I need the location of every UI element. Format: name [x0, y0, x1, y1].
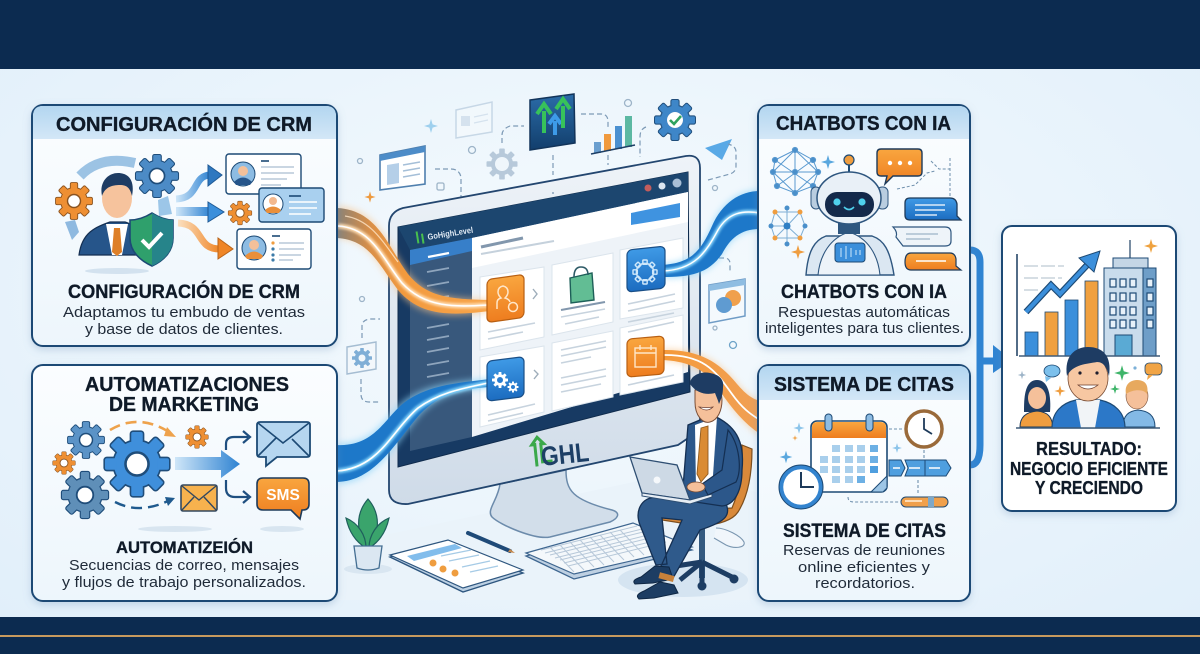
description: Adaptamos tu embudo de ventas	[63, 304, 305, 321]
icon tile: orange calendar	[627, 336, 664, 377]
icon: calendar	[811, 414, 887, 492]
arm and hand	[702, 430, 739, 495]
icon: small bar chart	[591, 116, 635, 154]
main arrow	[175, 450, 240, 478]
action button	[631, 203, 680, 225]
branch arrows	[226, 431, 250, 503]
small orange gear	[228, 202, 252, 224]
panel: CRM	[32, 105, 337, 346]
panel header band	[759, 366, 969, 400]
icon tile: blue gears	[487, 357, 524, 401]
office chair	[660, 445, 752, 590]
data stream: orange citas	[662, 349, 760, 436]
trousers	[638, 497, 728, 580]
icon: clock right	[906, 411, 942, 447]
top banner	[0, 0, 1200, 69]
description	[63, 304, 305, 338]
icon tile: orange user	[487, 274, 524, 323]
heading: SISTEMA DE CITAS	[774, 374, 954, 396]
heading: CONFIGURACIÓN DE CRM	[56, 112, 312, 136]
main content pane	[472, 192, 688, 437]
connector dashes	[361, 114, 736, 402]
description: inteligentes para tus clientes.	[765, 320, 964, 337]
shoes	[634, 566, 678, 599]
data stream: blue marketing	[337, 378, 490, 484]
icon: growth tile	[530, 94, 575, 150]
data stream: orange CRM	[337, 206, 490, 315]
panel: result	[1002, 226, 1176, 511]
icon: gear tile	[347, 342, 376, 374]
people: center man	[1052, 347, 1125, 428]
heading: CHATBOTS CON IA	[776, 113, 951, 135]
description: y base de datos de clientes.	[85, 321, 283, 338]
chat bubble: orange	[877, 149, 922, 184]
icon: gears	[53, 422, 208, 518]
chart axis and guides	[1017, 254, 1064, 356]
icon: envelope chat	[257, 422, 310, 466]
monitor stand	[490, 470, 618, 537]
icon: gears behind person	[56, 155, 178, 240]
subheading: SISTEMA DE CITAS	[783, 521, 946, 542]
logo text: GoHighLevel	[427, 225, 474, 242]
logo text	[417, 223, 474, 244]
bar chart	[1025, 281, 1098, 356]
header status icons	[644, 178, 682, 192]
connector arrow to result	[970, 250, 1012, 465]
contact card 2	[259, 188, 324, 222]
head	[690, 372, 723, 422]
dashed flow arrows	[110, 422, 176, 508]
timeline arrows	[889, 460, 951, 476]
GHL logo	[531, 432, 590, 473]
icon: faint gear	[486, 148, 518, 180]
icon: browser window	[380, 146, 425, 190]
jacket	[682, 415, 743, 506]
icon: shopping bag	[570, 267, 594, 303]
icon: faint browser	[456, 102, 492, 138]
description	[62, 557, 306, 591]
panel: chatbots	[758, 105, 970, 346]
icon: small network	[768, 206, 808, 246]
monitor body	[389, 156, 700, 504]
tablet document	[390, 540, 523, 592]
dashboard cards	[480, 238, 683, 427]
description	[765, 304, 964, 337]
icon: gear with check	[655, 100, 695, 140]
icon: robot	[806, 155, 894, 275]
dashboard header	[398, 172, 688, 250]
panel header band	[33, 106, 336, 139]
dashed links	[848, 429, 924, 502]
people: right man	[1123, 380, 1155, 427]
desk items	[344, 499, 692, 592]
icon tile: blue gear	[627, 246, 665, 292]
icon: SMS bubble: SMS	[266, 487, 300, 504]
description: recordatorios.	[815, 575, 915, 592]
people: left woman	[1020, 380, 1053, 427]
sidebar	[410, 238, 472, 451]
laptop	[630, 457, 712, 504]
icon: SMS bubble	[257, 478, 309, 519]
chat bubble: orange small	[905, 253, 961, 270]
subheading: AUTOMATIZEIÓN	[116, 538, 253, 557]
icon: shield with check	[130, 213, 173, 266]
bottom banner	[0, 617, 1200, 654]
icon: person in suit	[79, 173, 152, 256]
heading	[85, 374, 289, 416]
subheading: CHATBOTS CON IA	[781, 282, 947, 303]
icon: clock left	[779, 465, 823, 509]
description	[783, 542, 945, 592]
card details	[488, 294, 675, 421]
floating icons above monitor	[347, 94, 745, 402]
growth arrow	[1026, 251, 1100, 312]
flow arrows	[176, 165, 233, 259]
GHL logo: GHL	[540, 437, 590, 472]
pen	[468, 533, 510, 551]
description: Secuencias de correo, mensajes	[69, 557, 299, 574]
result text	[1010, 439, 1168, 498]
keyboard	[526, 523, 692, 579]
decorative sparkle and dots	[358, 100, 736, 348]
description: Respuestas automáticas	[778, 304, 950, 321]
icon: chat browser	[709, 279, 745, 323]
monitor	[389, 156, 700, 537]
panel: appointments	[758, 365, 970, 601]
desk surface	[340, 470, 780, 600]
description: online eficientes y	[798, 559, 931, 576]
chat bubble: blue	[905, 198, 961, 220]
panel: marketing automation	[32, 365, 337, 601]
icon: paper plane	[705, 139, 732, 160]
businessman at laptop	[618, 372, 752, 599]
webcam	[552, 192, 554, 194]
description: Reservas de reuniones	[783, 542, 945, 559]
shirt and tie	[695, 417, 717, 490]
data stream: blue chatbots	[662, 190, 760, 278]
chat bubble: gray	[893, 227, 951, 246]
contact card 1	[226, 154, 301, 194]
floor shadow	[618, 563, 748, 597]
subheading: CONFIGURACIÓN DE CRM	[68, 281, 300, 303]
icon: building	[1104, 240, 1156, 356]
monitor bezel	[398, 172, 690, 467]
orange progress pill	[901, 497, 948, 507]
dashed network	[897, 158, 950, 196]
description: y flujos de trabajo personalizados.	[62, 574, 306, 591]
icon: neural network	[770, 147, 821, 196]
result text: RESULTADO:	[1036, 439, 1142, 459]
panel header band	[759, 106, 969, 139]
plant	[344, 499, 392, 574]
heading: AUTOMATIZACIONES	[85, 374, 289, 396]
icon: orange envelope	[181, 485, 217, 511]
contact card 3	[237, 229, 311, 269]
small bubbles and sparkles	[1018, 363, 1162, 397]
result text: NEGOCIO EFICIENTE	[1010, 459, 1168, 479]
heading: DE MARKETING	[109, 394, 259, 416]
result text: Y CRECIENDO	[1035, 478, 1143, 498]
